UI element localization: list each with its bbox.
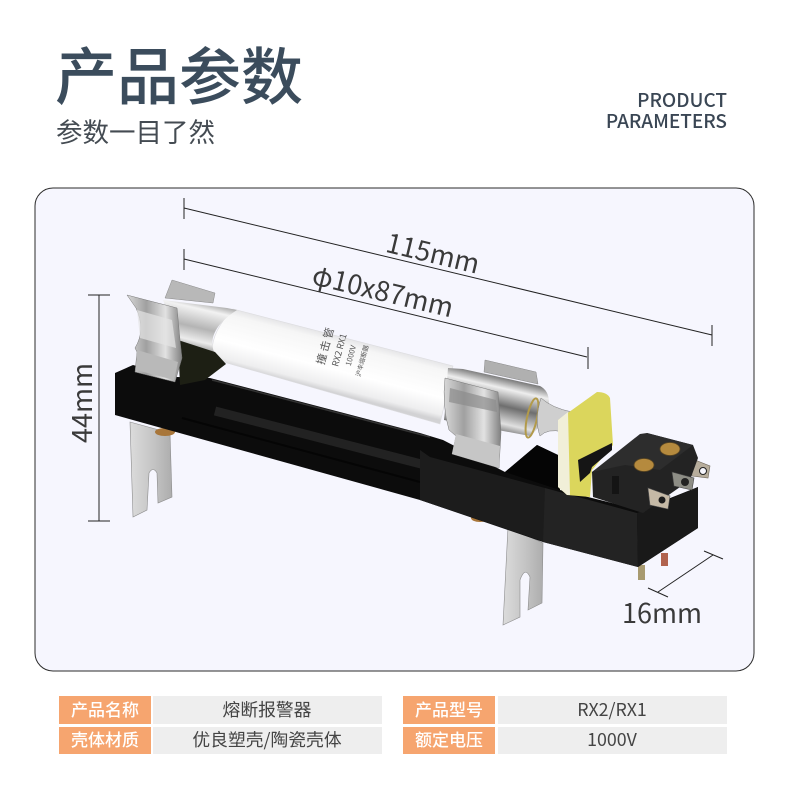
metal cap: left: [163, 300, 237, 352]
dimension: 44mm: 44mm: [61, 363, 100, 443]
yellow striker card: [558, 392, 613, 497]
switch terminal: back: [690, 458, 710, 478]
clip: left front: [127, 295, 182, 382]
brass screws: [634, 442, 680, 472]
base: black plastic holder: [115, 365, 698, 567]
row: product name: [59, 696, 382, 724]
title: 产品参数: [55, 27, 303, 117]
product: fuse alarm assembly: [115, 280, 710, 625]
terminal: right blade: [503, 527, 543, 625]
dimension: 16mm: 16mm: [622, 592, 702, 631]
fuse striker neck: [537, 398, 572, 436]
tube print: [312, 326, 372, 378]
row: product name: 熔断报警器: [223, 696, 312, 722]
row: model: [403, 696, 727, 724]
row: rated voltage: 额定电压: [415, 726, 483, 751]
dark insert below left cap: [178, 340, 226, 385]
dimension: 115mm: [184, 198, 712, 346]
dimension: 16mm: [622, 551, 723, 631]
tube print: 沪丰熔断器: [352, 343, 371, 378]
dimension: 10x87mm: φ10x87mm: [309, 254, 458, 325]
switch screw pins: [638, 553, 668, 580]
panel: product photo: [35, 188, 754, 671]
english heading: PRODUCT: [637, 86, 727, 113]
clip: right front: [444, 378, 501, 468]
row: shell material: 优良塑壳/陶瓷壳体: [192, 726, 342, 752]
tube print: RX2 RX1: [328, 332, 350, 368]
brass nuts under base: [155, 428, 489, 522]
metal cap: right: [444, 368, 549, 436]
clip: left back tab: [165, 280, 215, 303]
row: rated voltage: 1000V: [587, 726, 638, 752]
switch terminal: front: [648, 488, 670, 509]
dimension: 10x87mm: [184, 249, 588, 369]
row: model: 产品型号: [415, 696, 483, 721]
tube print: 1000V: [343, 343, 359, 367]
row: shell material: [59, 726, 382, 754]
english heading: PARAMETERS: [606, 107, 727, 134]
brass ring: [523, 397, 541, 439]
row: rated voltage: [403, 726, 727, 754]
subtitle: 参数一目了然: [56, 111, 215, 150]
row: model: RX2/RX1: [577, 696, 647, 722]
row: shell material: 壳体材质: [71, 726, 139, 751]
spec table: [59, 696, 727, 754]
dimension: 44mm: [61, 295, 110, 521]
fuse tube: [212, 309, 453, 424]
english heading: [606, 86, 727, 134]
terminal: left blade: [130, 422, 172, 517]
row: product name: 产品名称: [71, 696, 139, 721]
tube print: 撞 击 管: [312, 326, 338, 366]
dimension: 115mm: 115mm: [383, 221, 484, 282]
switch terminal: middle: [672, 472, 694, 490]
micro switch: [592, 433, 710, 513]
clip: right back tab: [484, 360, 538, 384]
